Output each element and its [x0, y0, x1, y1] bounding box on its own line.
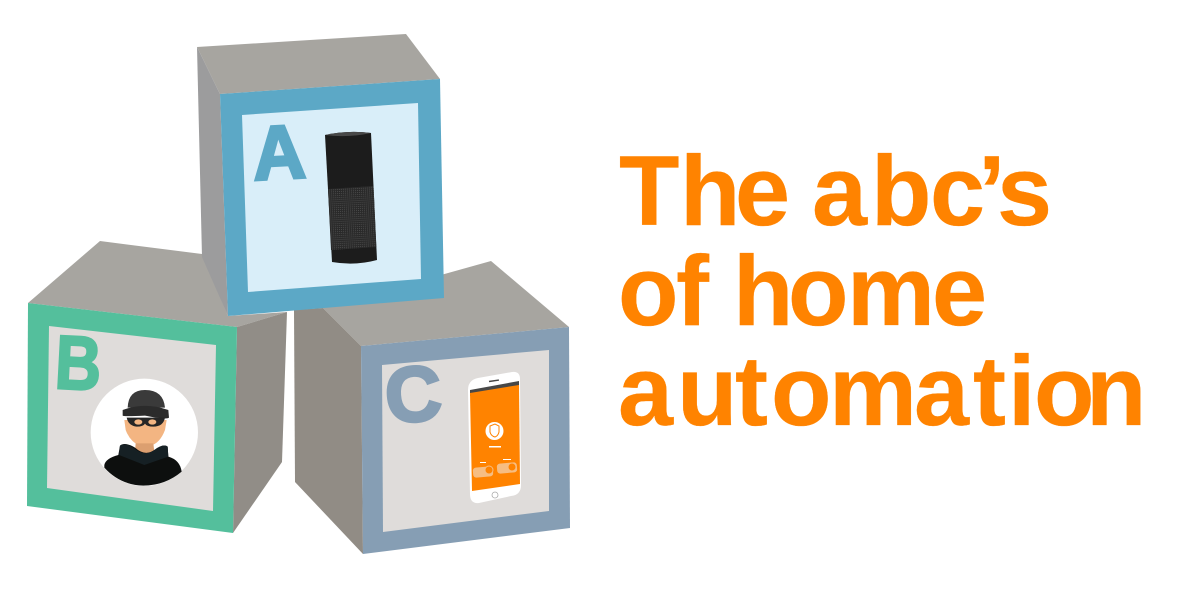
title: automation [618, 335, 1146, 446]
icon: smart speaker [325, 132, 377, 264]
block B [27, 241, 287, 533]
title: The abc’s [0, 135, 1052, 246]
icon: smartphone app [468, 372, 521, 503]
letter B: B [53, 319, 104, 407]
icon: burglar [91, 379, 198, 486]
letter A: A [250, 109, 307, 196]
letter C: C [382, 348, 444, 440]
block A [197, 34, 444, 316]
title [0, 135, 1146, 446]
title: of home [0, 235, 987, 346]
block C [294, 261, 570, 554]
